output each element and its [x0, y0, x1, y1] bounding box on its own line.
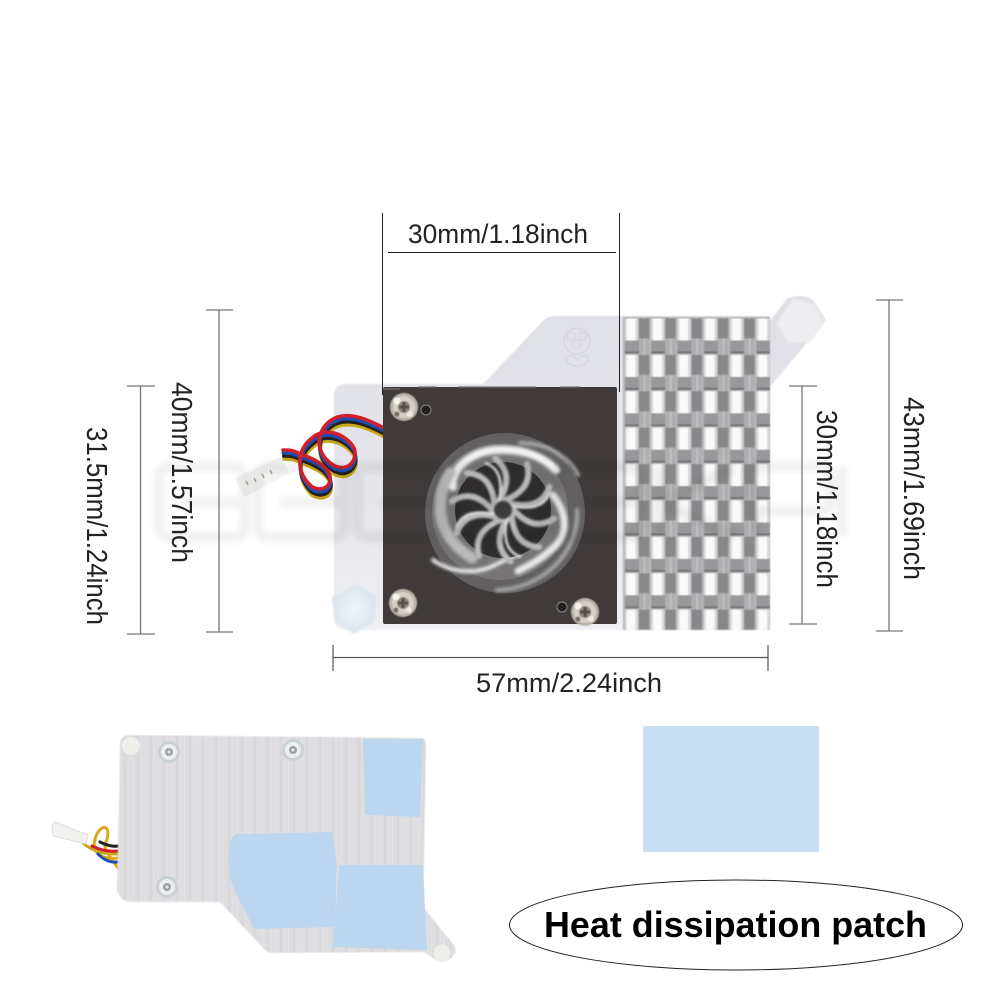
wire: black — [284, 422, 385, 495]
dimension: 43mm total height — [876, 300, 929, 631]
dimension: 57mm total width — [333, 645, 768, 698]
thermal pad top right — [363, 739, 423, 817]
dimension: 43mm total height: 43mm/1.69inch — [897, 397, 929, 580]
fan body — [383, 387, 617, 626]
icon: plastic hex nut top right — [777, 299, 824, 343]
heat sink — [623, 317, 770, 630]
callout: heat dissipation patch — [510, 880, 962, 970]
icon: fan rotor — [425, 433, 585, 593]
wire: red — [283, 416, 384, 489]
dimension: 31.5mm height — [80, 386, 155, 634]
connector plug — [235, 457, 290, 497]
wire: blue — [283, 419, 384, 492]
thermal pad bottom — [333, 865, 427, 950]
dimension: 30mm heat sink height: 30mm/1.18inch — [810, 410, 842, 588]
icon: plastic hex nut bottom left — [332, 584, 377, 634]
icon: screw bottom right — [571, 598, 599, 626]
wire: yellow — [284, 425, 385, 498]
heat dissipation patch sample — [643, 726, 819, 852]
dimension: 57mm total width: 57mm/2.24inch — [476, 668, 662, 698]
bolt two — [282, 739, 304, 761]
dimension: 30mm heat sink height — [789, 386, 842, 624]
back plate connector — [52, 822, 88, 844]
bolt three — [156, 876, 178, 898]
icon: raspberry logo — [564, 328, 590, 366]
dimension: top width — [382, 213, 620, 395]
thermal pad centre — [228, 832, 337, 929]
back view of heat sink plate — [52, 735, 456, 962]
dimension: 31.5mm height: 31.5mm/1.24inch — [80, 427, 112, 625]
dimension: 40mm height — [165, 310, 233, 632]
mounting plate — [334, 296, 826, 630]
dimension: top width: 30mm/1.18inch — [408, 219, 588, 249]
icon: screw top left — [390, 393, 418, 421]
bolt one — [158, 741, 180, 763]
dimension: 40mm height: 40mm/1.57inch — [165, 382, 197, 563]
rubber standoff right — [434, 944, 450, 962]
rubber standoff left — [122, 737, 140, 755]
watermark — [159, 467, 842, 537]
icon: screw bottom left — [389, 589, 417, 617]
back plate wires — [82, 827, 118, 868]
fan connector and wires — [283, 416, 385, 498]
callout: heat dissipation patch: Heat dissipation patch — [544, 904, 927, 945]
back plate body — [117, 735, 456, 962]
